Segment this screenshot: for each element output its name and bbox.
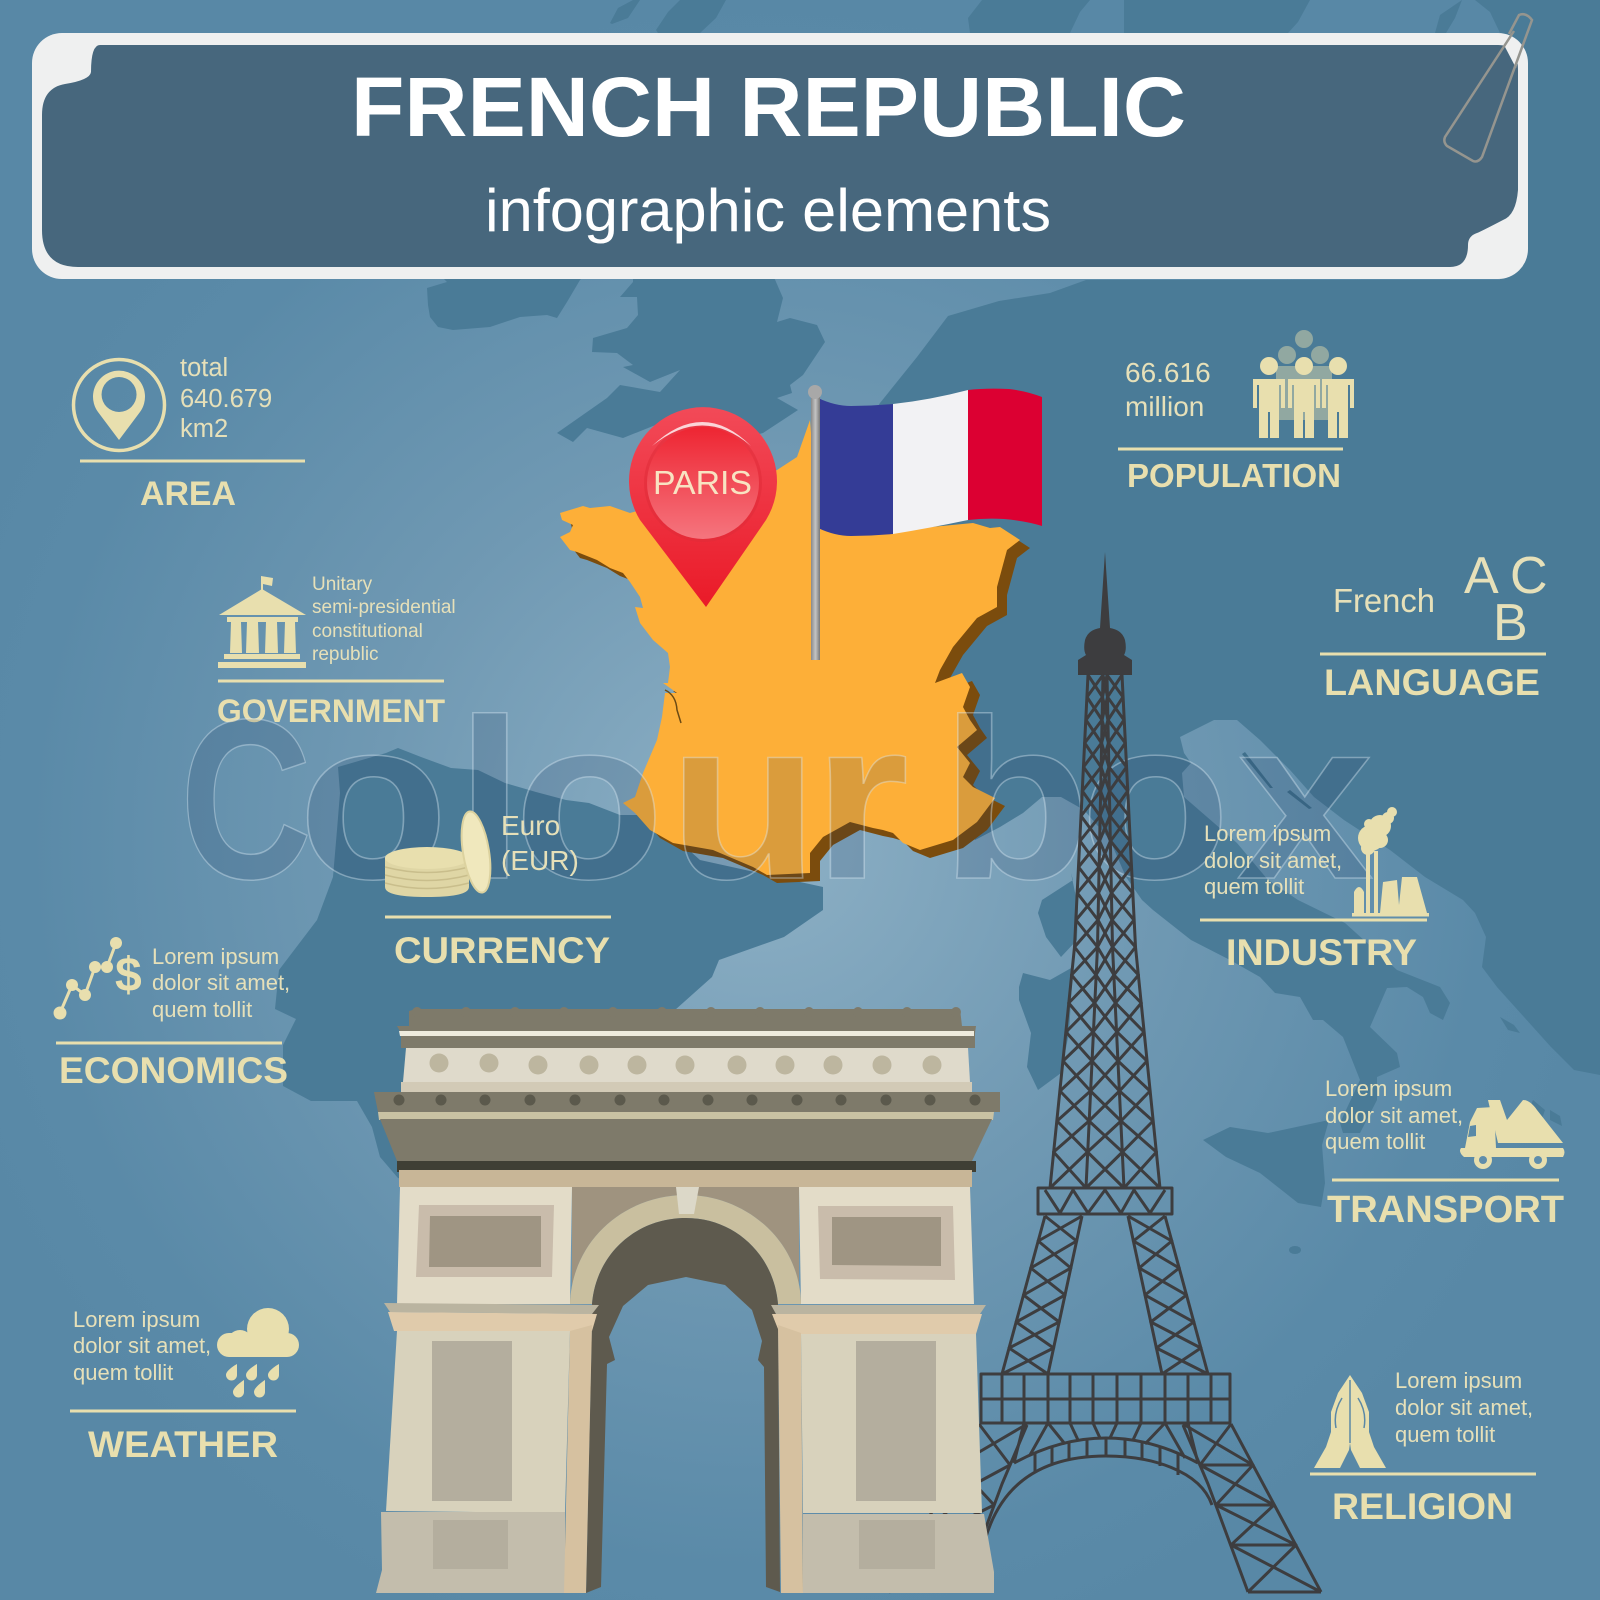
transport text: dolor sit amet, — [1325, 1103, 1463, 1128]
first platform — [981, 1374, 1230, 1423]
icon: location pin in circle — [74, 360, 164, 450]
transport text: Lorem ipsum — [1325, 1076, 1452, 1101]
tower arch — [985, 1423, 1212, 1540]
population text: 66.616 — [1125, 357, 1211, 388]
weather text: Lorem ipsum — [73, 1307, 200, 1332]
currency text — [501, 810, 579, 876]
industry text: quem tollit — [1204, 874, 1304, 899]
icon: growth chart with dollar — [54, 937, 142, 1020]
icon: letters: C — [1510, 547, 1548, 605]
right pier — [771, 1305, 986, 1314]
weather heading: WEATHER — [88, 1424, 278, 1465]
economics text: Lorem ipsum — [152, 944, 279, 969]
area text: 640.679 — [180, 385, 272, 413]
area block — [74, 354, 305, 513]
icon: rain cloud — [217, 1308, 299, 1398]
icon: letters: A — [1464, 547, 1499, 605]
french flag — [808, 385, 1042, 660]
population text: million — [1125, 391, 1204, 422]
weather block — [70, 1307, 299, 1465]
france map — [560, 420, 1030, 883]
government heading: GOVERNMENT — [217, 693, 445, 729]
frieze medallions — [430, 1054, 942, 1074]
industry text — [1204, 821, 1342, 899]
area heading: AREA — [140, 475, 236, 513]
cornice dots — [394, 1094, 980, 1106]
icon: group of people — [1253, 330, 1354, 438]
currency text: Euro — [501, 810, 560, 841]
subtitle: infographic elements — [485, 177, 1051, 244]
icon: paper clip — [1444, 14, 1532, 161]
economics text — [152, 944, 290, 1022]
transport text — [1325, 1076, 1463, 1154]
icon: factory — [1352, 807, 1429, 916]
religion text: dolor sit amet, — [1395, 1395, 1533, 1420]
economics block — [54, 937, 290, 1091]
spandrels — [570, 1187, 801, 1304]
icon: letters: B — [1493, 594, 1528, 652]
area text — [180, 354, 272, 443]
icon: praying hands — [1314, 1375, 1386, 1468]
weather text: quem tollit — [73, 1360, 173, 1385]
banner — [32, 33, 1528, 279]
transport block — [1325, 1076, 1564, 1231]
area text: total — [180, 354, 228, 382]
icon: coins — [385, 809, 495, 897]
left pier — [384, 1303, 599, 1314]
icon: dump truck — [1460, 1100, 1564, 1169]
religion text — [1395, 1368, 1533, 1447]
area text: km2 — [180, 415, 228, 443]
industry heading: INDUSTRY — [1226, 932, 1417, 973]
government text: Unitary — [312, 574, 373, 595]
icon: letters — [1464, 547, 1548, 652]
industry text: Lorem ipsum — [1204, 821, 1331, 846]
economics text: quem tollit — [152, 997, 252, 1022]
arc de triomphe — [374, 1007, 1000, 1593]
currency text: (EUR) — [501, 845, 579, 876]
currency heading: CURRENCY — [394, 930, 610, 971]
tower head — [1078, 552, 1132, 675]
map pin: Paris — [629, 407, 777, 607]
population block — [1118, 330, 1354, 494]
government block — [217, 574, 456, 729]
religion text: quem tollit — [1395, 1422, 1495, 1447]
economics text: dolor sit amet, — [152, 970, 290, 995]
language text: French — [1333, 582, 1435, 619]
map of surrounding Europe — [275, 0, 1600, 1254]
religion heading: RELIGION — [1332, 1486, 1513, 1527]
economics heading: ECONOMICS — [59, 1050, 288, 1091]
arch band — [570, 1195, 801, 1304]
reliefs — [416, 1205, 554, 1277]
icon: growth chart with dollar: $ — [115, 949, 142, 1002]
eiffel tower — [889, 552, 1321, 1592]
religion block — [1310, 1368, 1536, 1527]
government text: constitutional — [312, 621, 423, 642]
attic — [397, 1009, 976, 1048]
icon: government building — [218, 576, 306, 668]
population text — [1125, 357, 1211, 422]
industry block — [1200, 807, 1429, 973]
weather text: dolor sit amet, — [73, 1333, 211, 1358]
watermark: C — [180, 673, 312, 927]
attic bumps — [412, 1007, 961, 1017]
pin label: PARIS — [653, 464, 752, 501]
industry text: dolor sit amet, — [1204, 848, 1342, 873]
population heading: POPULATION — [1127, 457, 1341, 494]
weather text — [73, 1307, 211, 1385]
language heading: LANGUAGE — [1324, 662, 1540, 703]
government text: semi-presidential — [312, 597, 456, 618]
title: FRENCH REPUBLIC — [351, 60, 1186, 154]
government text: republic — [312, 644, 379, 665]
second platform — [1038, 1188, 1172, 1214]
language block — [1320, 547, 1548, 703]
government text — [312, 574, 456, 665]
religion text: Lorem ipsum — [1395, 1368, 1522, 1393]
transport heading: TRANSPORT — [1327, 1189, 1564, 1231]
transport text: quem tollit — [1325, 1129, 1425, 1154]
upper walls — [397, 1187, 572, 1304]
currency block — [385, 809, 611, 971]
watermark: olourbox — [298, 672, 1374, 927]
